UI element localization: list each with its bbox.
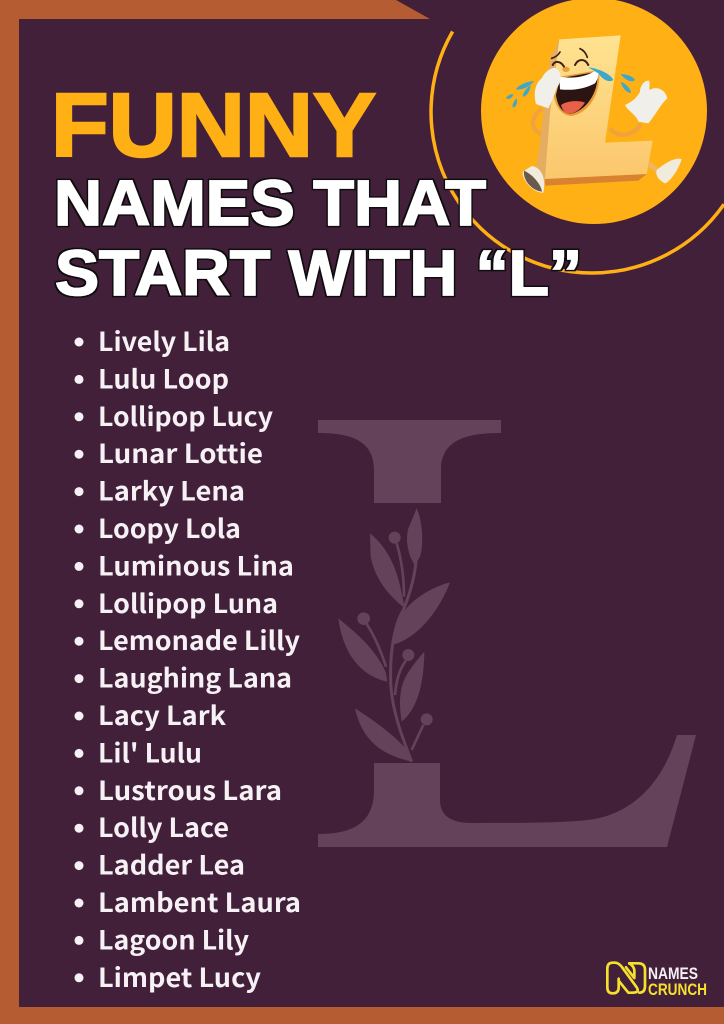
logo: Names Crunch: NAMES [648, 964, 698, 983]
title line: START WITH L: START WITH “L” [55, 237, 582, 309]
decorative large letter L with leaves [318, 420, 696, 847]
names list [74, 322, 301, 995]
names list: Luminous Lina [98, 546, 294, 583]
names list: Lil' Lulu [98, 733, 202, 770]
decorative ring arc [431, 32, 724, 273]
names list: Larky Lena [98, 472, 245, 509]
names list: Lemonade Lilly [98, 621, 300, 658]
names list: Lolly Lace [98, 808, 229, 845]
names list: Lollipop Luna [98, 584, 278, 621]
logo: Names Crunch: CRUNCH [648, 980, 707, 999]
names list: Lulu Loop [98, 359, 229, 396]
names list: Lustrous Lara [98, 771, 282, 808]
logo: Names Crunch [607, 963, 707, 999]
icon: looped N [607, 963, 645, 993]
yellow circle badge [481, 0, 707, 224]
title line: FUNNY: FUNNY [51, 76, 376, 176]
icon: laughing letter L mascot [506, 35, 682, 193]
names list: Loopy Lola [98, 509, 241, 546]
names list: Limpet Lucy [98, 958, 261, 995]
names list: Lagoon Lily [98, 920, 249, 957]
names list: Lambent Laura [98, 883, 301, 920]
title [51, 76, 582, 309]
names list: Lollipop Lucy [98, 397, 273, 434]
names list: Laughing Lana [98, 659, 292, 696]
title line: NAMES THAT: NAMES THAT [54, 167, 486, 239]
names list: Lunar Lottie [98, 434, 263, 471]
names list: Lacy Lark [98, 696, 226, 733]
names list: Lively Lila [98, 322, 230, 359]
names list: Ladder Lea [98, 846, 245, 883]
